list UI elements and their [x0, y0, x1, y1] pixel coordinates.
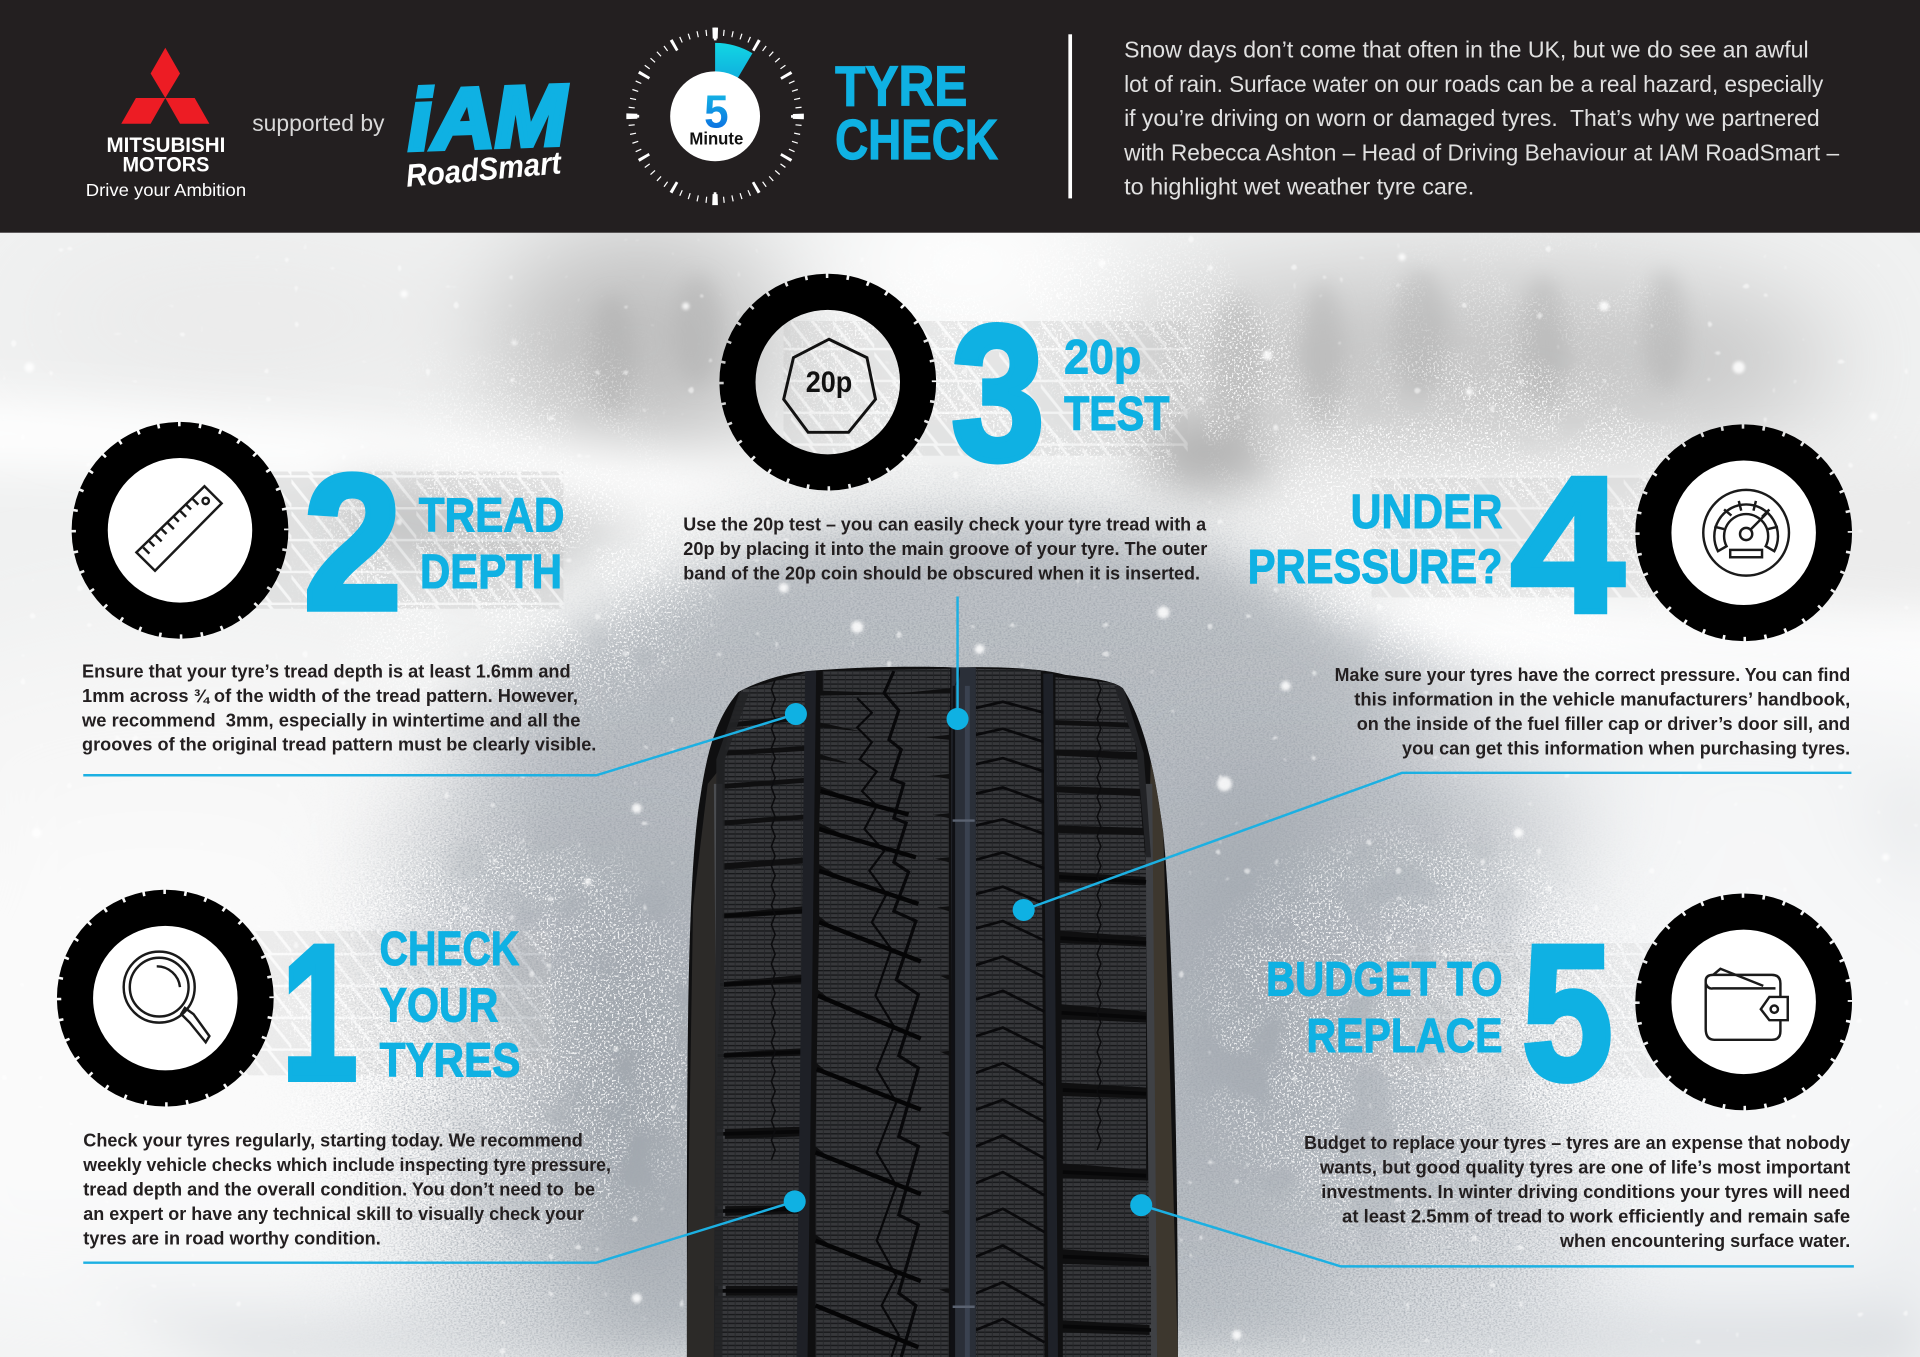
callout: check — [83, 1190, 806, 1263]
heading: check your tyres: YOUR — [380, 978, 498, 1032]
callout: tread depth — [83, 703, 807, 775]
text: 20p test: band of the 20p coin should be obscured when it is inserted. — [683, 562, 1200, 583]
text: under pressure — [1335, 664, 1850, 758]
text: tread depth: 1mm across ¾ of the width of the tread pattern. However, — [82, 685, 578, 706]
icon: 5 minute stopwatch: Minute — [689, 129, 743, 149]
road surface — [0, 465, 1920, 1357]
icon: tyre with magnifying glass — [60, 893, 271, 1103]
icon: tyre with wallet — [1638, 897, 1849, 1107]
title: TYRE — [835, 54, 967, 117]
middle-left tread blocks — [823, 669, 950, 693]
text: 20p test: Use the 20p test – you can easily check your tyre tread with a — [683, 513, 1207, 534]
panel: step 3 20p test — [683, 277, 1208, 583]
icon: tyre with 20p coin — [722, 277, 933, 487]
text: 20p test: 20p by placing it into the main groove of your tyre. The outer — [683, 538, 1208, 559]
number 2: 2 — [304, 435, 402, 650]
text: check your tyres: tyres are in road worthy condition. — [83, 1227, 381, 1248]
heading: 20p test — [1064, 331, 1170, 441]
panel: step 2 tread depth — [75, 425, 596, 755]
Mitsubishi Motors logo: MITSUBISHI — [107, 133, 225, 157]
intro paragraph — [1123, 37, 1840, 200]
number 4: 4 — [1511, 437, 1624, 652]
text: tread depth — [81, 660, 596, 755]
icon: 5 minute stopwatch: 5 — [704, 85, 729, 137]
right outer tread blocks — [1056, 677, 1130, 723]
intro paragraph: with Rebecca Ashton – Head of Driving Behaviour at IAM RoadSmart – — [1123, 139, 1840, 165]
callout: pressure — [1013, 773, 1851, 921]
sidewalls — [686, 772, 718, 1357]
text: 20p test — [683, 513, 1208, 583]
intro paragraph: if you’re driving on worn or damaged tyres. That’s why we partnered — [1124, 105, 1820, 131]
heading: 20p test: 20p — [1064, 331, 1141, 385]
text: check your tyres — [82, 1129, 611, 1248]
middle-right tread blocks — [976, 669, 1044, 1357]
icon: 5 minute stopwatch — [631, 32, 799, 200]
text: check your tyres: tread depth and the overall condition. You don’t need to be — [83, 1178, 595, 1199]
text: under pressure: this information in the vehicle manufacturers’ handbook, — [1354, 688, 1850, 709]
panel: step 5 budget to replace — [1266, 897, 1851, 1251]
text: check your tyres: weekly vehicle checks which include inspecting tyre pressure, — [82, 1154, 611, 1175]
circumferential grooves — [951, 667, 976, 1357]
heading: under pressure: PRESSURE? — [1248, 540, 1502, 594]
icon: tyre with pressure gauge — [1638, 427, 1849, 638]
block sipes in outer columns — [771, 680, 1101, 1160]
supported by label: supported by — [252, 110, 385, 136]
heading: tread depth: TREAD — [419, 489, 564, 543]
zigzag and slanted grooves — [857, 671, 918, 1357]
callout: 20p test — [947, 596, 969, 730]
heading: budget to replace: REPLACE — [1307, 1009, 1502, 1063]
icon: tyre with 20p coin: 20p — [806, 366, 852, 399]
heading: check your tyres — [380, 922, 520, 1088]
text: under pressure: you can get this information when purchasing tyres. — [1402, 737, 1850, 758]
text: under pressure: on the inside of the fuel filler cap or driver’s door sill, and — [1357, 713, 1850, 734]
Mitsubishi Motors logo: Drive your Ambition — [86, 180, 246, 200]
heading: budget to replace — [1266, 953, 1502, 1063]
icon: tyre with ruler — [75, 425, 285, 636]
number 3: 3 — [951, 285, 1044, 500]
tread track marks behind headings — [220, 321, 1739, 1078]
text: tread depth: Ensure that your tyre’s tread depth is at least 1.6mm and — [82, 660, 571, 681]
text: budget to replace — [1304, 1132, 1851, 1251]
text: check your tyres: Check your tyres regularly, starting today. We recommend — [83, 1129, 583, 1150]
number 5: 5 — [1522, 905, 1613, 1120]
callout: budget — [1130, 1194, 1854, 1266]
heading: 20p test: TEST — [1064, 387, 1170, 441]
callout lines and dots — [83, 596, 1854, 1266]
title — [835, 54, 998, 171]
heading: under pressure — [1248, 485, 1502, 594]
text: budget to replace: investments. In winter driving conditions your tyres will need — [1321, 1181, 1850, 1202]
heading: check your tyres: CHECK — [380, 922, 519, 976]
shoulder hatch — [714, 692, 749, 1357]
text: budget to replace: when encountering surface water. — [1559, 1230, 1850, 1251]
panel: step 4 under pressure — [1248, 427, 1850, 758]
outer column lateral grooves — [715, 877, 1151, 1330]
central tyre photo — [680, 661, 1188, 1357]
intro paragraph: lot of rain. Surface water on our roads can be a real hazard, especially — [1124, 71, 1824, 97]
intro paragraph: to highlight wet weather tyre care. — [1124, 174, 1474, 200]
IAM RoadSmart logo: iAM — [406, 67, 570, 169]
heading: tread depth — [419, 489, 564, 599]
text: tread depth: we recommend 3mm, especially in wintertime and all the — [81, 709, 580, 730]
panel: step 1 check your tyres — [60, 893, 611, 1248]
number 1: 1 — [282, 905, 358, 1120]
snow spray speckle — [273, 256, 1688, 1273]
text: budget to replace: at least 2.5mm of tread to work efficiently and remain safe — [1342, 1205, 1850, 1226]
Mitsubishi Motors logo: MOTORS — [122, 152, 209, 176]
Mitsubishi Motors logo — [86, 48, 246, 200]
left outer tread blocks — [715, 669, 1151, 1357]
IAM RoadSmart logo: RoadSmart — [404, 144, 564, 194]
intro paragraph: Snow days don’t come that often in the UK, but we do see an awful — [1124, 37, 1809, 63]
chevron sipes — [976, 702, 1044, 1342]
heading: check your tyres: TYRES — [380, 1034, 520, 1088]
text: budget to replace: Budget to replace your tyres – tyres are an expense that nobody — [1304, 1132, 1851, 1153]
text: check your tyres: an expert or have any technical skill to visually check your — [83, 1203, 585, 1224]
header bar — [0, 0, 1920, 233]
heading: tread depth: DEPTH — [420, 545, 562, 599]
text: budget to replace: wants, but good quality tyres are one of life’s most important — [1319, 1156, 1851, 1177]
title: CHECK — [835, 108, 998, 171]
heading: budget to replace: BUDGET TO — [1266, 953, 1502, 1007]
heading: under pressure: UNDER — [1351, 485, 1502, 539]
text: under pressure: Make sure your tyres have the correct pressure. You can find — [1335, 664, 1850, 685]
text: tread depth: grooves of the original tread pattern must be clearly visible. — [82, 734, 596, 755]
